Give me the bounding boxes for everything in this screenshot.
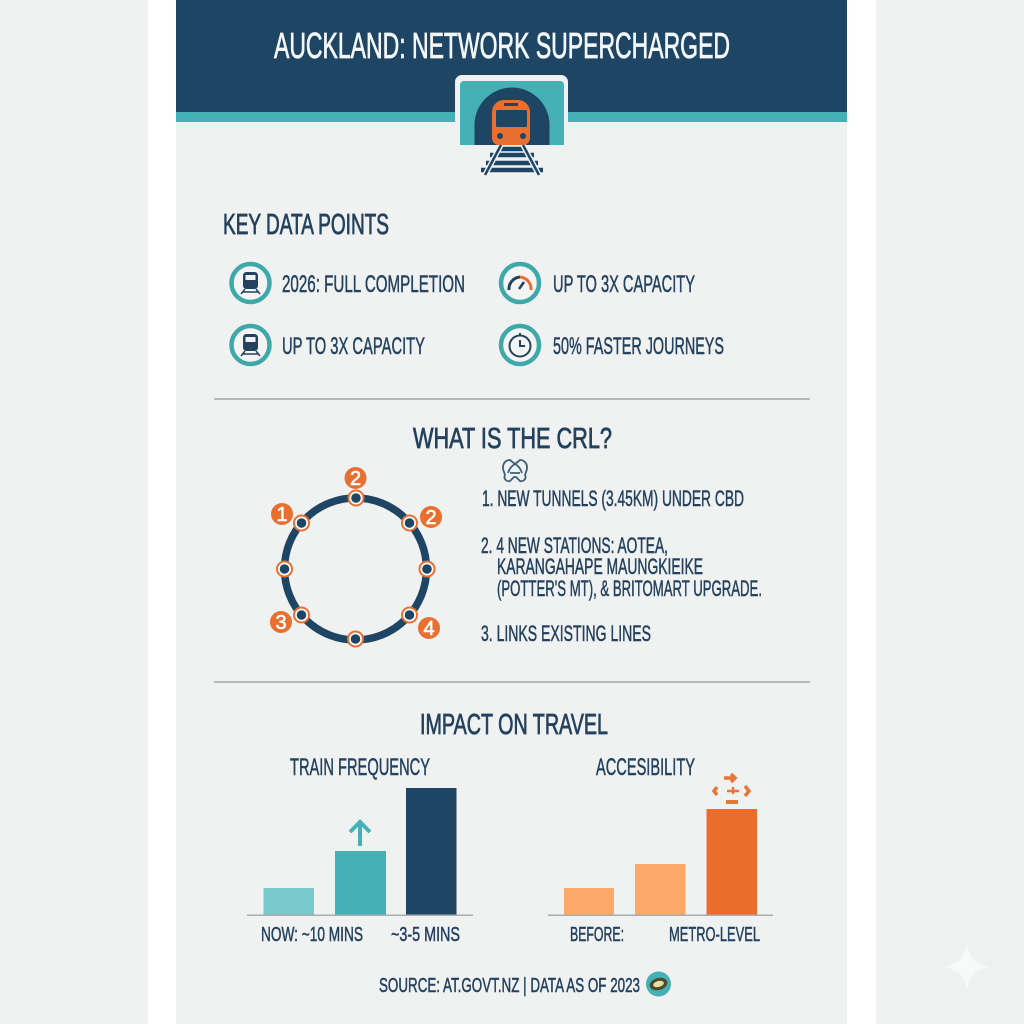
bar labels: ~3-5 MINS [391,924,460,946]
heading: what is the CRL: WHAT IS THE CRL? [413,423,612,455]
list item 1: 1. NEW TUNNELS (3.45KM) UNDER CBD [482,486,744,511]
icon: kiwi badge [646,972,671,996]
data point: faster journeys stopwatch: 50% FASTER JOURNEYS [553,333,724,360]
data point: capacity gauge [501,264,695,302]
data point: faster journeys stopwatch [501,326,724,364]
station badges: 2 [350,468,361,490]
data point: capacity gauge: UP TO 3X CAPACITY [553,271,695,298]
header banner [176,0,847,122]
chart title: ACCESIBILITY [596,754,695,781]
station badges: 4 [423,618,435,640]
list item 2: 2. 4 NEW STATIONS: AOTEA, [481,533,668,558]
station badges: 1 [276,504,288,526]
watermark sparkle [943,943,991,991]
list item 2: (POTTER'S MT), & BRITOMART UPGRADE. [497,576,762,601]
chart: accessibility [548,754,773,946]
icon: train in tunnel [455,75,568,175]
bar labels [570,924,760,946]
bar labels: METRO-LEVEL [669,924,760,946]
icon: directional arrows [714,774,749,802]
list item 2: KARANGAHAPE MAUNGKIEIKE [497,554,703,579]
diagram: CRL loop with stations [270,467,442,646]
station badges [270,467,442,640]
data point: up to 3x capacity [232,326,425,364]
station badges: 2 [425,507,437,529]
data point: 2026 full completion: 2026: FULL COMPLETION [282,271,465,298]
bar labels: NOW: ~10 MINS [261,924,363,946]
arrow: up [350,822,370,846]
chart: train frequency [247,754,473,946]
station badges: 3 [275,612,287,634]
icon: tunnel knot [503,460,527,481]
chart title: TRAIN FREQUENCY [290,754,430,781]
heading: impact on travel: IMPACT ON TRAVEL [420,709,608,741]
data point: 2026 full completion [232,264,465,302]
data point: up to 3x capacity: UP TO 3X CAPACITY [282,333,425,360]
bar labels: BEFORE: [570,924,624,946]
CRL numbered list [481,486,762,646]
heading: key data points: KEY DATA POINTS [223,209,389,241]
source line: SOURCE: AT.GOVT.NZ | DATA AS OF 2023 [379,975,640,997]
list item 2 [481,533,762,601]
list item 3: 3. LINKS EXISTING LINES [481,621,651,646]
title: AUCKLAND: NETWORK SUPERCHARGED [274,25,730,66]
